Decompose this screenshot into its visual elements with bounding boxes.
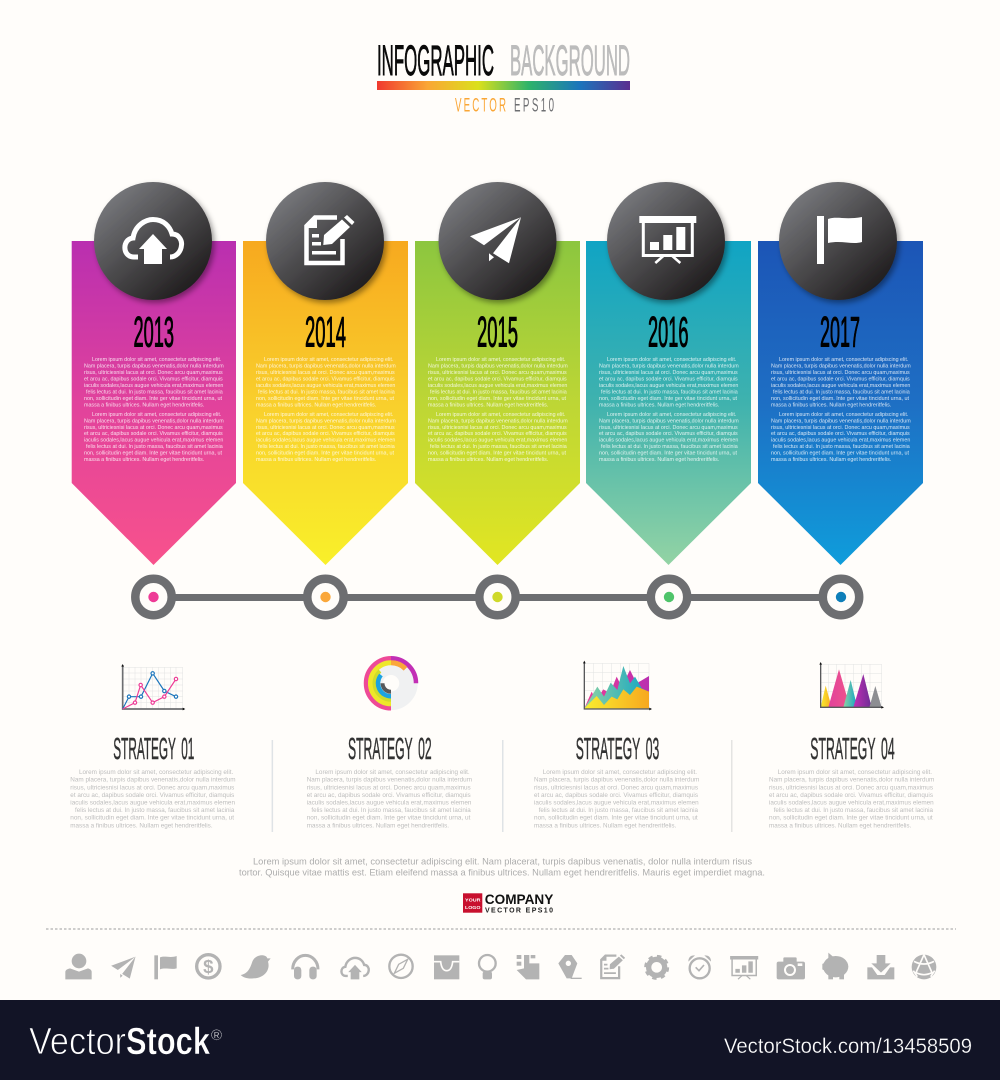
strategy 01: massa a finibus ultrices. Nullam eget hendreritfelis.	[70, 822, 213, 829]
strategy 01	[70, 731, 236, 829]
icon: dollar coin: $	[203, 956, 214, 977]
panel: 2016: iaculis sodales,lacus augue vehicula erat,maximus elemen	[599, 383, 738, 389]
panel: 2016: massa a finibus ultrices. Nullam eget hendreritfelis.	[599, 457, 720, 463]
panel: 2013	[72, 182, 236, 565]
panel: 2014: felis lectus at dui. In justo massa, faucibus sit amet lacinia	[258, 389, 396, 395]
icon: light bulb	[479, 955, 496, 979]
panel: 2014: Lorem ipsum dolor sit amet, consectetur adipiscing elit.	[264, 412, 394, 418]
icon: compass	[389, 955, 413, 978]
panel: 2016: risus, ultriciesnisi lacus at orci. Donec arcu quam,maximus	[599, 370, 738, 376]
strategy 04: Nam placera, turpis dapibus venenatis,dolor nulla interdum	[769, 777, 934, 784]
panel: 2016: et arcu ac, dapibus sodale orci. Vivamus efficitur, diamquis	[599, 431, 738, 437]
strategy 04: massa a finibus ultrices. Nullam eget hendreritfelis.	[769, 822, 912, 829]
panel: 2016	[586, 182, 751, 565]
closing text block: Lorem ipsum dolor sit amet, consectetur adipiscing elit. Nam placerat, turpis dapibus venenatis, dolor nulla interdum risus	[253, 856, 752, 866]
strategy 03	[534, 731, 699, 829]
icon row	[65, 953, 936, 979]
icon: dollar coin	[197, 955, 220, 978]
panel: 2013: massa a finibus ultrices. Nullam eget hendreritfelis.	[84, 402, 205, 408]
strategy 01: risus, ultriciesnisi lacus at orci. Donec arcu quam,maximus	[70, 784, 234, 791]
strategy 02	[307, 731, 472, 829]
strategy 03: non, sollicitudin eget diam. Inte ger vitae tincidunt urna, ut	[534, 815, 698, 822]
icon: camera	[777, 957, 805, 979]
strategy 01: STRATEGY 01	[113, 731, 194, 766]
panel: 2015: massa a finibus ultrices. Nullam eget hendreritfelis.	[428, 402, 549, 408]
company logo	[463, 891, 554, 914]
panel: 2016: felis lectus at dui. In justo massa, faucibus sit amet lacinia	[601, 389, 739, 395]
panel: 2015	[415, 182, 580, 565]
area chart icon	[583, 661, 652, 710]
panel: 2013: Nam placera, turpis dapibus venenatis,dolor nulla interdum	[84, 364, 224, 370]
company logo: YOUR	[465, 898, 481, 904]
panel: 2016: non, sollicitudin eget diam. Inte ger vitae tincidunt urna, ut	[599, 451, 737, 457]
panel: 2013: 2013	[134, 308, 174, 356]
panel: 2015: Nam placera, turpis dapibus venenatis,dolor nulla interdum	[428, 418, 568, 424]
panel: 2013: Nam placera, turpis dapibus venenatis,dolor nulla interdum	[84, 418, 224, 424]
panel: 2015: Nam placera, turpis dapibus venenatis,dolor nulla interdum	[428, 364, 568, 370]
title: VECTOR	[455, 95, 506, 117]
panel: 2013: non, sollicitudin eget diam. Inte ger vitae tincidunt urna, ut	[84, 396, 222, 402]
panel: 2015: felis lectus at dui. In justo massa, faucibus sit amet lacinia	[430, 444, 568, 450]
strategy 02: Nam placera, turpis dapibus venenatis,dolor nulla interdum	[307, 777, 472, 784]
icon: note and pencil	[600, 954, 625, 978]
panel: 2013: risus, ultriciesnisi lacus at orci. Donec arcu quam,maximus	[84, 370, 223, 376]
strategy 04: felis lectus at dui. In justo massa, faucibus sit amet lacinia	[774, 807, 933, 814]
panel: 2013: et arcu ac, dapibus sodale orci. Vivamus efficitur, diamquis	[84, 376, 223, 382]
panel: 2016: non, sollicitudin eget diam. Inte ger vitae tincidunt urna, ut	[599, 396, 737, 402]
panel: 2017	[758, 182, 923, 565]
icon: inbox	[434, 955, 459, 979]
panel: 2015: 2015	[477, 308, 518, 356]
strategy 03: STRATEGY 03	[576, 731, 659, 766]
panel: 2015: non, sollicitudin eget diam. Inte ger vitae tincidunt urna, ut	[428, 396, 566, 402]
panel: 2013: non, sollicitudin eget diam. Inte ger vitae tincidunt urna, ut	[84, 451, 222, 457]
text: BACKGROUND	[510, 37, 630, 85]
icon: gear	[646, 956, 668, 978]
panel: 2015: Lorem ipsum dolor sit amet, consectetur adipiscing elit.	[436, 357, 566, 363]
panel: 2017: risus, ultriciesnisi lacus at orci. Donec arcu quam,maximus	[771, 425, 910, 431]
panel: 2015: felis lectus at dui. In justo massa, faucibus sit amet lacinia	[430, 389, 568, 395]
strategy 04: risus, ultriciesnisi lacus at orci. Donec arcu quam,maximus	[769, 784, 933, 791]
triangle chart icon	[819, 662, 884, 709]
company logo: VECTOR EPS10	[485, 907, 553, 914]
title	[377, 37, 630, 117]
panel: 2013: massa a finibus ultrices. Nullam eget hendreritfelis.	[84, 457, 205, 463]
panel: 2015: risus, ultriciesnisi lacus at orci. Donec arcu quam,maximus	[428, 370, 567, 376]
panel: 2017: et arcu ac, dapibus sodale orci. Vivamus efficitur, diamquis	[771, 376, 910, 382]
panel: 2017: Lorem ipsum dolor sit amet, consectetur adipiscing elit.	[779, 412, 909, 418]
strategy 03: felis lectus at dui. In justo massa, faucibus sit amet lacinia	[539, 807, 698, 814]
panel: 2013: Lorem ipsum dolor sit amet, consectetur adipiscing elit.	[92, 357, 222, 363]
icon: pen nib	[558, 955, 582, 979]
panel: 2014	[243, 182, 408, 565]
panel: 2014: Nam placera, turpis dapibus venenatis,dolor nulla interdum	[256, 418, 396, 424]
panel: 2016: massa a finibus ultrices. Nullam eget hendreritfelis.	[599, 402, 720, 408]
panel: 2017: iaculis sodales,lacus augue vehicula erat,maximus elemen	[771, 383, 910, 389]
panel: 2016: felis lectus at dui. In justo massa, faucibus sit amet lacinia	[601, 444, 739, 450]
icon: headphones	[293, 955, 318, 979]
strategy 04	[769, 731, 934, 829]
strategy 03: Lorem ipsum dolor sit amet, consectetur adipiscing elit.	[543, 769, 697, 776]
icon: download	[867, 955, 894, 979]
panel: 2013: risus, ultriciesnisi lacus at orci. Donec arcu quam,maximus	[84, 425, 223, 431]
panel: 2017: non, sollicitudin eget diam. Inte ger vitae tincidunt urna, ut	[771, 396, 909, 402]
panel: 2013: et arcu ac, dapibus sodale orci. Vivamus efficitur, diamquis	[84, 431, 223, 437]
panel: 2016: Lorem ipsum dolor sit amet, consectetur adipiscing elit.	[607, 357, 737, 363]
panel: 2013: Lorem ipsum dolor sit amet, consectetur adipiscing elit.	[92, 412, 222, 418]
panel: 2015: et arcu ac, dapibus sodale orci. Vivamus efficitur, diamquis	[428, 431, 567, 437]
panel: 2015: massa a finibus ultrices. Nullam eget hendreritfelis.	[428, 457, 549, 463]
line chart icon	[121, 664, 185, 710]
panel: 2015: risus, ultriciesnisi lacus at orci. Donec arcu quam,maximus	[428, 425, 567, 431]
panel: 2017: et arcu ac, dapibus sodale orci. Vivamus efficitur, diamquis	[771, 431, 910, 437]
closing text block: tortor. Quisque vitae mattis est. Etiam eleifend massa a finibus ultrices. Nullam eget hendreritfelis. Mauris eget imperdiet magna.	[239, 868, 765, 878]
company logo: LOGO	[465, 905, 481, 911]
panel: 2015: Lorem ipsum dolor sit amet, consectetur adipiscing elit.	[436, 412, 566, 418]
icon: pointing hand	[517, 955, 539, 979]
icon: cloud upload	[341, 958, 369, 979]
panel: 2014: non, sollicitudin eget diam. Inte ger vitae tincidunt urna, ut	[256, 396, 394, 402]
footer band: Vector	[29, 1021, 126, 1063]
panel: 2016: Nam placera, turpis dapibus venenatis,dolor nulla interdum	[599, 418, 739, 424]
icon: flag	[154, 955, 177, 979]
panel: 2016: risus, ultriciesnisi lacus at orci. Donec arcu quam,maximus	[599, 425, 738, 431]
panel: 2015: iaculis sodales,lacus augue vehicula erat,maximus elemen	[428, 383, 567, 389]
panel: 2016: Lorem ipsum dolor sit amet, consectetur adipiscing elit.	[607, 412, 737, 418]
strategy 02: non, sollicitudin eget diam. Inte ger vitae tincidunt urna, ut	[307, 815, 471, 822]
panel: 2017: 2017	[820, 308, 860, 356]
footer band: Stock	[126, 1021, 211, 1063]
panel: 2014: non, sollicitudin eget diam. Inte ger vitae tincidunt urna, ut	[256, 451, 394, 457]
strategy 02: iaculis sodales,lacus augue vehicula erat,maximus elemen	[307, 800, 472, 807]
panel: 2016: 2016	[648, 308, 688, 356]
panel: 2016: Nam placera, turpis dapibus venenatis,dolor nulla interdum	[599, 364, 739, 370]
footer band	[0, 1000, 1000, 1080]
timeline	[135, 579, 859, 615]
footer band: ®	[211, 1027, 222, 1044]
strategy 01: felis lectus at dui. In justo massa, faucibus sit amet lacinia	[75, 807, 235, 814]
panel: 2014: massa a finibus ultrices. Nullam eget hendreritfelis.	[256, 402, 377, 408]
panel: 2014: iaculis sodales,lacus augue vehicula erat,maximus elemen	[256, 438, 395, 444]
panel: 2014: risus, ultriciesnisi lacus at orci. Donec arcu quam,maximus	[256, 425, 395, 431]
strategy 02: et arcu ac, dapibus sodale orci. Vivamus efficitur, diamquis	[307, 792, 471, 799]
strategy 04: non, sollicitudin eget diam. Inte ger vitae tincidunt urna, ut	[769, 815, 933, 822]
strategy 04: iaculis sodales,lacus augue vehicula erat,maximus elemen	[769, 800, 934, 807]
strategy 02: felis lectus at dui. In justo massa, faucibus sit amet lacinia	[311, 807, 471, 814]
company logo: COMPANY	[485, 891, 554, 907]
panel: 2017: iaculis sodales,lacus augue vehicula erat,maximus elemen	[771, 438, 910, 444]
strategy 03: risus, ultriciesnisi lacus at orci. Donec arcu quam,maximus	[534, 784, 698, 791]
panel: 2014: et arcu ac, dapibus sodale orci. Vivamus efficitur, diamquis	[256, 376, 395, 382]
panel: 2017: felis lectus at dui. In justo massa, faucibus sit amet lacinia	[773, 389, 911, 395]
strategy 02: Lorem ipsum dolor sit amet, consectetur adipiscing elit.	[315, 769, 470, 776]
panel: 2017: Nam placera, turpis dapibus venenatis,dolor nulla interdum	[771, 364, 911, 370]
panel: 2014: et arcu ac, dapibus sodale orci. Vivamus efficitur, diamquis	[256, 431, 395, 437]
panel: 2015: non, sollicitudin eget diam. Inte ger vitae tincidunt urna, ut	[428, 451, 566, 457]
panel: 2014: Nam placera, turpis dapibus venenatis,dolor nulla interdum	[256, 364, 396, 370]
strategy 03: massa a finibus ultrices. Nullam eget hendreritfelis.	[534, 822, 677, 829]
panel: 2016: iaculis sodales,lacus augue vehicula erat,maximus elemen	[599, 438, 738, 444]
panel: 2017: massa a finibus ultrices. Nullam eget hendreritfelis.	[771, 457, 892, 463]
strategy 03: Nam placera, turpis dapibus venenatis,dolor nulla interdum	[534, 777, 699, 784]
strategy 01: Lorem ipsum dolor sit amet, consectetur adipiscing elit.	[79, 769, 234, 776]
panel: 2014: felis lectus at dui. In justo massa, faucibus sit amet lacinia	[258, 444, 396, 450]
strategy 04: et arcu ac, dapibus sodale orci. Vivamus efficitur, diamquis	[769, 792, 933, 799]
strategy 01: Nam placera, turpis dapibus venenatis,dolor nulla interdum	[70, 777, 236, 784]
strategy 02: massa a finibus ultrices. Nullam eget hendreritfelis.	[307, 822, 449, 829]
icon: bird	[241, 955, 271, 979]
panel: 2013: iaculis sodales,lacus augue vehicula erat,maximus elemen	[84, 383, 223, 389]
strategy 01: et arcu ac, dapibus sodale orci. Vivamus efficitur, diamquis	[70, 792, 234, 799]
panel: 2014: risus, ultriciesnisi lacus at orci. Donec arcu quam,maximus	[256, 370, 395, 376]
icon: person	[65, 954, 92, 979]
panel: 2013: iaculis sodales,lacus augue vehicula erat,maximus elemen	[84, 438, 223, 444]
strategy 01: non, sollicitudin eget diam. Inte ger vitae tincidunt urna, ut	[70, 815, 234, 822]
footer band: VectorStock.com/13458509	[724, 1035, 972, 1058]
panel: 2017: Nam placera, turpis dapibus venenatis,dolor nulla interdum	[771, 418, 911, 424]
title: INFOGRAPHIC	[377, 37, 494, 85]
panel: 2013: felis lectus at dui. In justo massa, faucibus sit amet lacinia	[86, 444, 224, 450]
title: EPS10	[514, 95, 554, 117]
panel: 2014: Lorem ipsum dolor sit amet, consectetur adipiscing elit.	[264, 357, 394, 363]
closing text block	[239, 856, 765, 878]
strategy 01: iaculis sodales,lacus augue vehicula erat,maximus elemen	[70, 800, 235, 807]
panel: 2015: iaculis sodales,lacus augue vehicula erat,maximus elemen	[428, 438, 567, 444]
panel: 2015: et arcu ac, dapibus sodale orci. Vivamus efficitur, diamquis	[428, 376, 567, 382]
icon: piggy bank	[822, 953, 848, 979]
panel: 2014: 2014	[305, 308, 346, 356]
panel: 2017: massa a finibus ultrices. Nullam eget hendreritfelis.	[771, 402, 892, 408]
strategy 02: risus, ultriciesnisi lacus at orci. Donec arcu quam,maximus	[307, 784, 471, 791]
panel: 2014: iaculis sodales,lacus augue vehicula erat,maximus elemen	[256, 383, 395, 389]
strategy 02: STRATEGY 02	[348, 731, 432, 766]
donut chart icon	[366, 658, 416, 708]
icon: alarm clock	[688, 955, 711, 978]
panel: 2017: felis lectus at dui. In justo massa, faucibus sit amet lacinia	[773, 444, 911, 450]
panel: 2017: Lorem ipsum dolor sit amet, consectetur adipiscing elit.	[779, 357, 909, 363]
panel: 2014: massa a finibus ultrices. Nullam eget hendreritfelis.	[256, 457, 377, 463]
panel: 2016: et arcu ac, dapibus sodale orci. Vivamus efficitur, diamquis	[599, 376, 738, 382]
icon: sphere	[912, 955, 936, 979]
strategy 03: et arcu ac, dapibus sodale orci. Vivamus efficitur, diamquis	[534, 792, 698, 799]
panel: 2017: risus, ultriciesnisi lacus at orci. Donec arcu quam,maximus	[771, 370, 910, 376]
strategy 03: iaculis sodales,lacus augue vehicula erat,maximus elemen	[534, 800, 699, 807]
panel: 2013: felis lectus at dui. In justo massa, faucibus sit amet lacinia	[86, 389, 224, 395]
icon: presentation board	[730, 956, 758, 979]
strategy 04: Lorem ipsum dolor sit amet, consectetur adipiscing elit.	[778, 769, 932, 776]
icon: paper plane	[111, 957, 136, 979]
panel: 2017: non, sollicitudin eget diam. Inte ger vitae tincidunt urna, ut	[771, 451, 909, 457]
